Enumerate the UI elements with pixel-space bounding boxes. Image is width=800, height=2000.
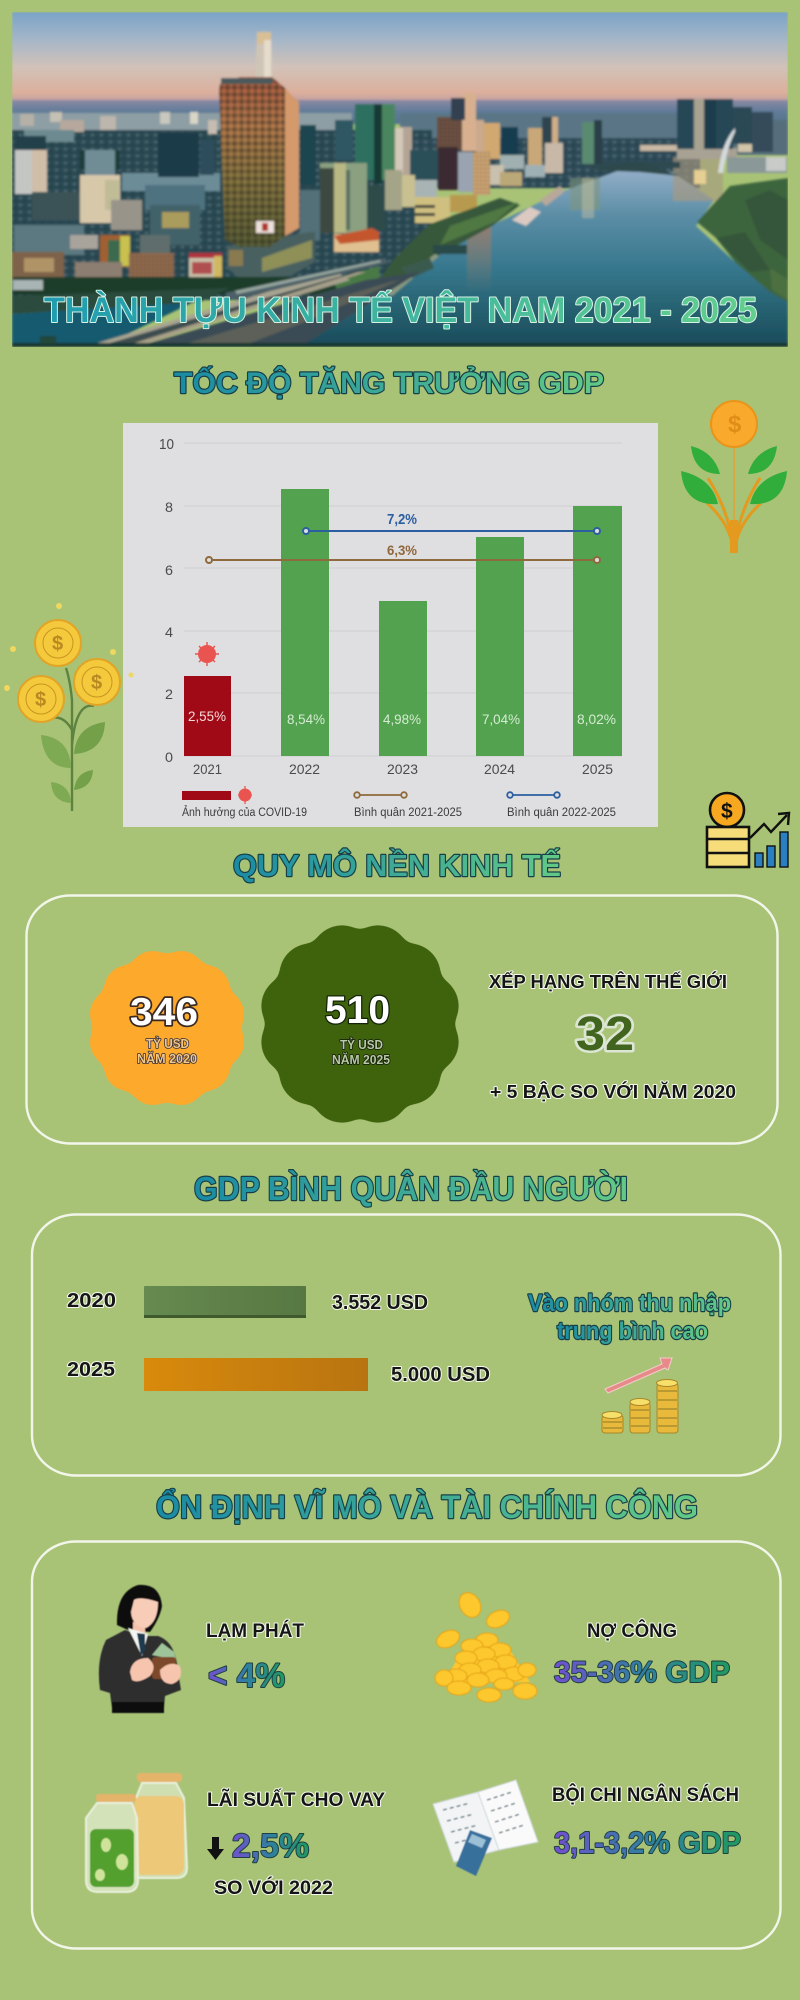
value 346: TỶ USD xyxy=(146,1036,189,1051)
legend: Bình quân 2022-2025 xyxy=(507,807,616,819)
world ranking xyxy=(489,971,736,1102)
item: budget deficit: 3,1-3,2% GDP xyxy=(554,1825,741,1860)
y axis labels: 10 xyxy=(159,436,174,453)
average line 2022-2025: 7,2% xyxy=(387,511,417,528)
blob: 510 billion USD 2025 xyxy=(217,881,503,1167)
heading: economy size: QUY MÔ NỀN KINH TẾ xyxy=(233,847,561,883)
icon: woman with wallet xyxy=(99,1585,181,1713)
world ranking: + 5 BẬC SO VỚI NĂM 2020 xyxy=(490,1081,736,1102)
item: inflation: < 4% xyxy=(208,1657,285,1695)
hero photo: city skyline and river xyxy=(12,12,788,347)
panel: economy size xyxy=(26,881,778,1167)
icon: rising coin stacks xyxy=(602,1358,678,1433)
bar 2025: 2025 xyxy=(67,1359,115,1381)
legend xyxy=(182,786,616,819)
callout: upper-middle income: trung bình cao xyxy=(557,1318,708,1345)
bar 2025 xyxy=(67,1358,490,1391)
riverfront low rise xyxy=(415,197,450,223)
item: lending rate: SO VỚI 2022 xyxy=(214,1877,333,1899)
y axis labels: 0 xyxy=(165,749,173,765)
year labels: 2023 xyxy=(387,761,418,777)
icon: pile of gold coins xyxy=(434,1589,537,1702)
value 510: TỶ USD xyxy=(340,1037,383,1052)
value 510: NĂM 2025 xyxy=(332,1052,390,1067)
item: public debt: 35-36% GDP xyxy=(554,1656,730,1689)
item: lending rate: LÃI SUẤT CHO VAY xyxy=(207,1789,385,1811)
trees and road xyxy=(13,277,358,295)
y axis labels: 6 xyxy=(165,562,173,578)
legend: Ảnh hưởng của COVID-19 xyxy=(182,806,307,819)
panel: GDP per capita xyxy=(32,1214,780,1476)
icon: coin stack with growth chart: $ xyxy=(721,800,733,823)
average line 2021-2025: 6,3% xyxy=(387,542,418,558)
panel: GDP growth chart xyxy=(123,423,658,827)
item: budget deficit xyxy=(433,1780,741,1876)
item: lending rate: 2,5% xyxy=(232,1827,309,1864)
item: public debt: NỢ CÔNG xyxy=(587,1620,677,1642)
icon: virus marker xyxy=(195,642,219,666)
y axis labels: 8 xyxy=(165,499,173,515)
bar values: 7,04% xyxy=(482,711,520,727)
world ranking: 32 xyxy=(576,1008,634,1061)
green embankment xyxy=(382,197,520,278)
item: budget deficit: BỘI CHI NGÂN SÁCH xyxy=(552,1784,739,1806)
bottom left xyxy=(12,302,192,345)
main tower base xyxy=(227,232,315,278)
title: THÀNH TỰU KINH TẾ VIỆT NAM 2021 - 2025 xyxy=(44,290,757,330)
y axis labels xyxy=(159,436,174,765)
bar 2020: 3.552 USD xyxy=(332,1292,428,1314)
value 346 xyxy=(130,991,198,1066)
bar 2020 xyxy=(67,1286,428,1318)
bar values: 4,98% xyxy=(383,711,421,727)
river xyxy=(270,170,788,347)
bars xyxy=(184,489,622,756)
bar values xyxy=(188,708,616,727)
icon: plant with gold coins: $ xyxy=(91,672,102,694)
icon: plant with orange coin xyxy=(681,401,787,553)
item: public debt xyxy=(434,1589,730,1702)
icon: plant with gold coins: $ xyxy=(52,633,63,655)
average line 2022-2025 xyxy=(303,511,600,534)
item: lending rate xyxy=(86,1773,385,1899)
panel: macro stability and public finance xyxy=(32,1542,780,1948)
item: inflation xyxy=(99,1585,304,1713)
bar values: 8,02% xyxy=(577,711,616,727)
year labels: 2021 xyxy=(193,761,222,777)
heading: GDP per capita: GDP BÌNH QUÂN ĐẦU NGƯỜI xyxy=(194,1170,628,1207)
year labels xyxy=(193,761,613,777)
left foreground buildings xyxy=(13,148,34,196)
value 510 xyxy=(325,989,390,1067)
bridge xyxy=(84,274,350,347)
heading: GDP growth: TỐC ĐỘ TĂNG TRƯỞNG GDP xyxy=(174,366,604,400)
bar values: 8,54% xyxy=(287,711,325,727)
icon: down arrow xyxy=(207,1837,224,1860)
value 346: NĂM 2020 xyxy=(137,1051,197,1066)
y axis labels: 2 xyxy=(165,686,173,702)
icon: jars of money and coins xyxy=(86,1773,187,1892)
callout: upper-middle income: Vào nhóm thu nhập xyxy=(528,1290,731,1317)
bar 2025: 5.000 USD xyxy=(391,1364,490,1386)
year labels: 2025 xyxy=(582,761,613,777)
icon: plant with orange coin: $ xyxy=(728,411,742,438)
orange roof building xyxy=(334,234,379,252)
icon: plant with gold coins: $ xyxy=(35,689,46,711)
value 346: 346 xyxy=(130,991,198,1034)
callout: upper-middle income xyxy=(528,1290,731,1345)
year labels: 2022 xyxy=(289,761,320,777)
central skyline xyxy=(541,116,553,144)
main tower xyxy=(218,76,286,248)
bar values: 2,55% xyxy=(188,708,226,724)
blob: 346 billion USD 2020 xyxy=(55,916,279,1140)
item: inflation: LẠM PHÁT xyxy=(206,1620,304,1642)
distant city band xyxy=(12,113,352,135)
value 510: 510 xyxy=(325,989,390,1032)
icon: plant with gold coins xyxy=(4,603,134,811)
far bridge and low rise xyxy=(590,162,680,168)
right bank vegetation xyxy=(697,178,788,302)
world ranking: XẾP HẠNG TRÊN THẾ GIỚI xyxy=(489,971,727,992)
boats xyxy=(512,207,541,226)
cream block xyxy=(320,163,367,233)
icon: notebook and calculator xyxy=(433,1780,538,1876)
heading: macro stability: ỔN ĐỊNH VĨ MÔ VÀ TÀI CHÍNH CÔNG xyxy=(156,1489,698,1525)
icon: coin stack with growth chart xyxy=(707,793,789,867)
far right towers xyxy=(677,99,733,149)
year labels: 2024 xyxy=(484,761,515,777)
teal tower xyxy=(355,104,374,180)
average line 2021-2025 xyxy=(206,542,600,563)
y axis labels: 4 xyxy=(165,624,173,640)
bar 2020: 2020 xyxy=(67,1290,116,1312)
legend: Bình quân 2021-2025 xyxy=(354,807,462,819)
